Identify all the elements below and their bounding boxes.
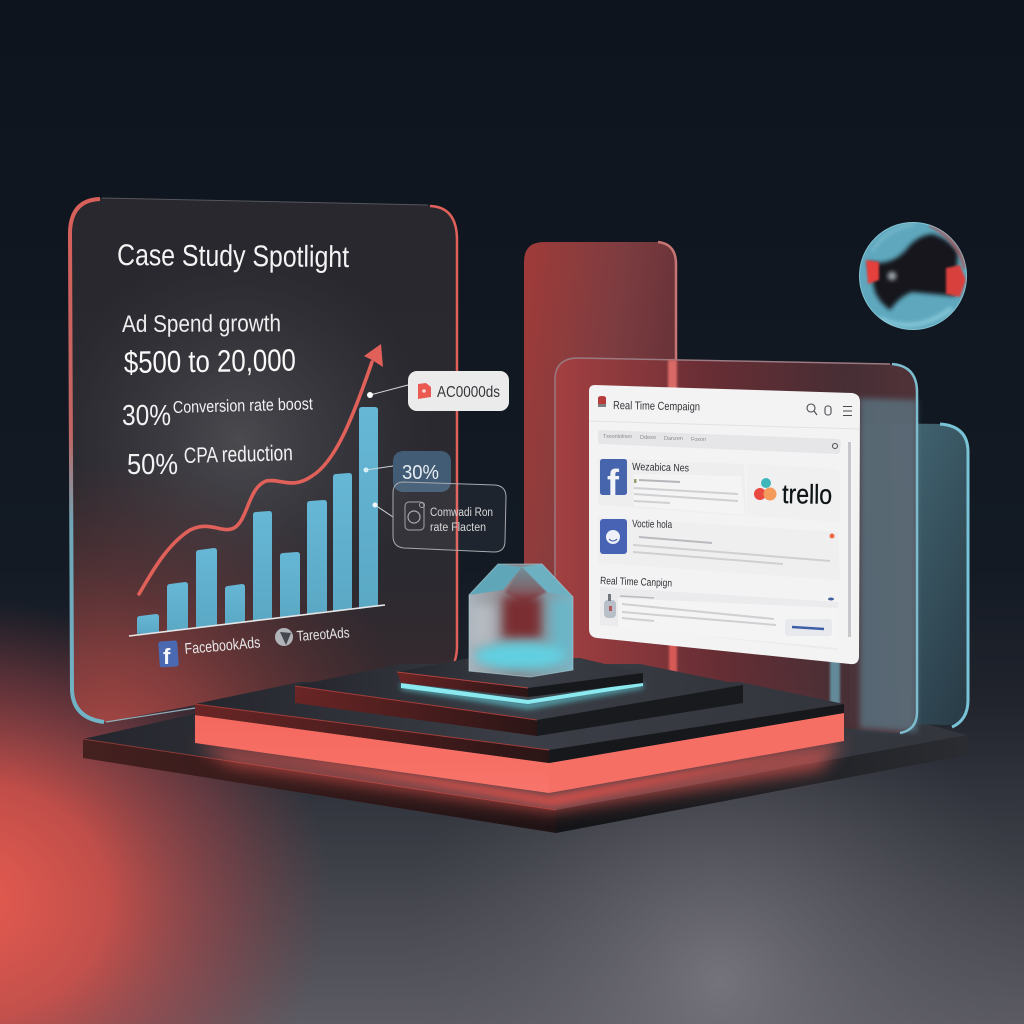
nav bar: Danzen (664, 436, 683, 442)
scrollbar (848, 442, 851, 637)
callout: ads label: AC0000ds (437, 384, 500, 401)
card: trello (747, 464, 840, 522)
crystal house (469, 564, 573, 677)
row: facebook: Wezabica Nes (632, 461, 689, 474)
nav bar: Ddeso (640, 435, 656, 441)
heading: real time campaign row: Real Time Canpign (600, 575, 672, 590)
legend: facebook ads (158, 634, 261, 669)
text: conversion stat: Conversion rate boost (173, 394, 313, 417)
growth arrow (139, 344, 383, 594)
icon: window logo (598, 396, 606, 407)
callout: conversion rate: rate Flacten (430, 522, 486, 534)
row: voctie hola: Voctie hola (632, 518, 672, 531)
platform: cyan glow strip (401, 682, 643, 709)
panel: glass campaign card (555, 358, 917, 733)
nav bar (598, 430, 841, 454)
text: cpa stat (127, 440, 293, 481)
row: voctie hola (598, 517, 840, 580)
bar chart (137, 407, 378, 634)
heading: case study spotlight: Case Study Spotlight (117, 239, 350, 274)
window title: Real Time Cempaign (613, 400, 700, 414)
text: conversion stat: 30% (122, 400, 171, 432)
row: facebook: f (607, 462, 620, 503)
row: facebook (598, 458, 746, 516)
callout: 30 percent (364, 451, 451, 492)
panel: case study glass card (68, 198, 457, 722)
text: spend figures: $500 to 20,000 (124, 343, 296, 380)
callout: ads label (367, 371, 509, 411)
callout: conversion rate (372, 482, 506, 552)
icons: window toolbar (807, 404, 852, 416)
text: cpa stat: CPA reduction (183, 440, 293, 468)
card: trello: trello (782, 479, 832, 510)
platform: base tier (83, 690, 967, 833)
panel: red background card (524, 242, 676, 690)
text: cpa stat: 50% (127, 449, 178, 481)
window: real time campaign (589, 385, 860, 664)
nav bar: Txeontolneo (603, 434, 632, 440)
platform: third tier (295, 664, 743, 736)
callout: conversion rate: Comwadi Ron (430, 507, 493, 519)
glow under second tier (195, 740, 844, 812)
panel: back teal glass (850, 423, 968, 727)
text: conversion stat (122, 394, 313, 432)
legend: facebook ads: f (163, 644, 171, 669)
callout: 30 percent: 30% (402, 462, 439, 484)
legend: target ads (275, 625, 350, 646)
icon: glass bubble (859, 222, 967, 330)
legend: target ads: TareotAds (296, 625, 350, 645)
legend: facebook ads: FacebookAds (184, 634, 261, 658)
chart baseline (129, 605, 385, 636)
platform: top tier (397, 658, 643, 697)
text: ad spend growth: Ad Spend growth (122, 310, 281, 338)
nav bar: Foxon (691, 437, 706, 443)
platform: glowing coral tier (195, 682, 844, 793)
row: campaign detail (600, 587, 838, 650)
